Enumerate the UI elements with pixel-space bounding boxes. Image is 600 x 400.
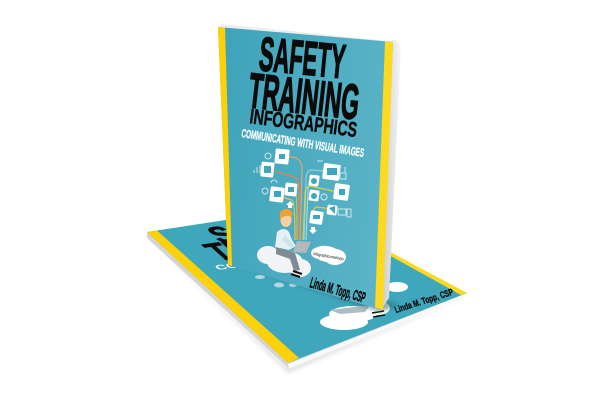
flat book title: SAFETY (200, 208, 341, 248)
person head (280, 213, 292, 227)
subtitle: COMMUNICATING WITH VISUAL IMAGES (241, 126, 365, 160)
faint outline icons (254, 153, 351, 217)
flat book right yellow strip (304, 208, 467, 295)
title line TRAINING: TRAINING (246, 63, 362, 131)
person hair (280, 209, 292, 219)
upright book right yellow strip (375, 42, 393, 310)
upright book top edge (218, 24, 399, 44)
flat book shoes (372, 311, 385, 317)
person (275, 209, 311, 277)
lower flat book (147, 208, 467, 372)
person shoes (291, 271, 302, 277)
upright book (218, 24, 401, 310)
person torso (275, 229, 296, 250)
flat book title (196, 208, 367, 267)
flat book small icons (255, 275, 297, 288)
upright book left yellow strip (218, 27, 232, 266)
person legs (276, 247, 300, 271)
title line INFOGRAPHICS: INFOGRAPHICS (248, 105, 358, 142)
arrows (286, 201, 317, 234)
author: Linda M. Topp, CSP (308, 274, 368, 306)
person arm (282, 235, 294, 248)
person laptop (293, 241, 311, 253)
icon glyphs inside tiles (264, 154, 345, 219)
connector lines (275, 157, 342, 240)
flat book left yellow strip (147, 230, 299, 363)
flat book person legs (330, 305, 370, 314)
upright book cover (218, 27, 393, 310)
flat book cover (147, 208, 467, 363)
upright book pages (381, 40, 401, 310)
title line SAFETY: SAFETY (257, 27, 348, 88)
flat book small cloud (386, 282, 408, 292)
flat book title: TRAINING (196, 220, 367, 267)
flat book cloud (320, 301, 390, 330)
flat book subtitle: COMMUNICATING (212, 247, 345, 271)
flat book page edge (147, 232, 467, 368)
flat book shadow (148, 238, 467, 372)
cloud under person (257, 246, 311, 277)
book title (246, 27, 362, 142)
logo cloud (311, 244, 346, 265)
icon tiles (260, 148, 350, 225)
logo text: infographicsmonkeys (313, 251, 345, 261)
flat book author: Linda M. Topp, CSP (393, 287, 455, 316)
upright book shadow (228, 255, 400, 312)
